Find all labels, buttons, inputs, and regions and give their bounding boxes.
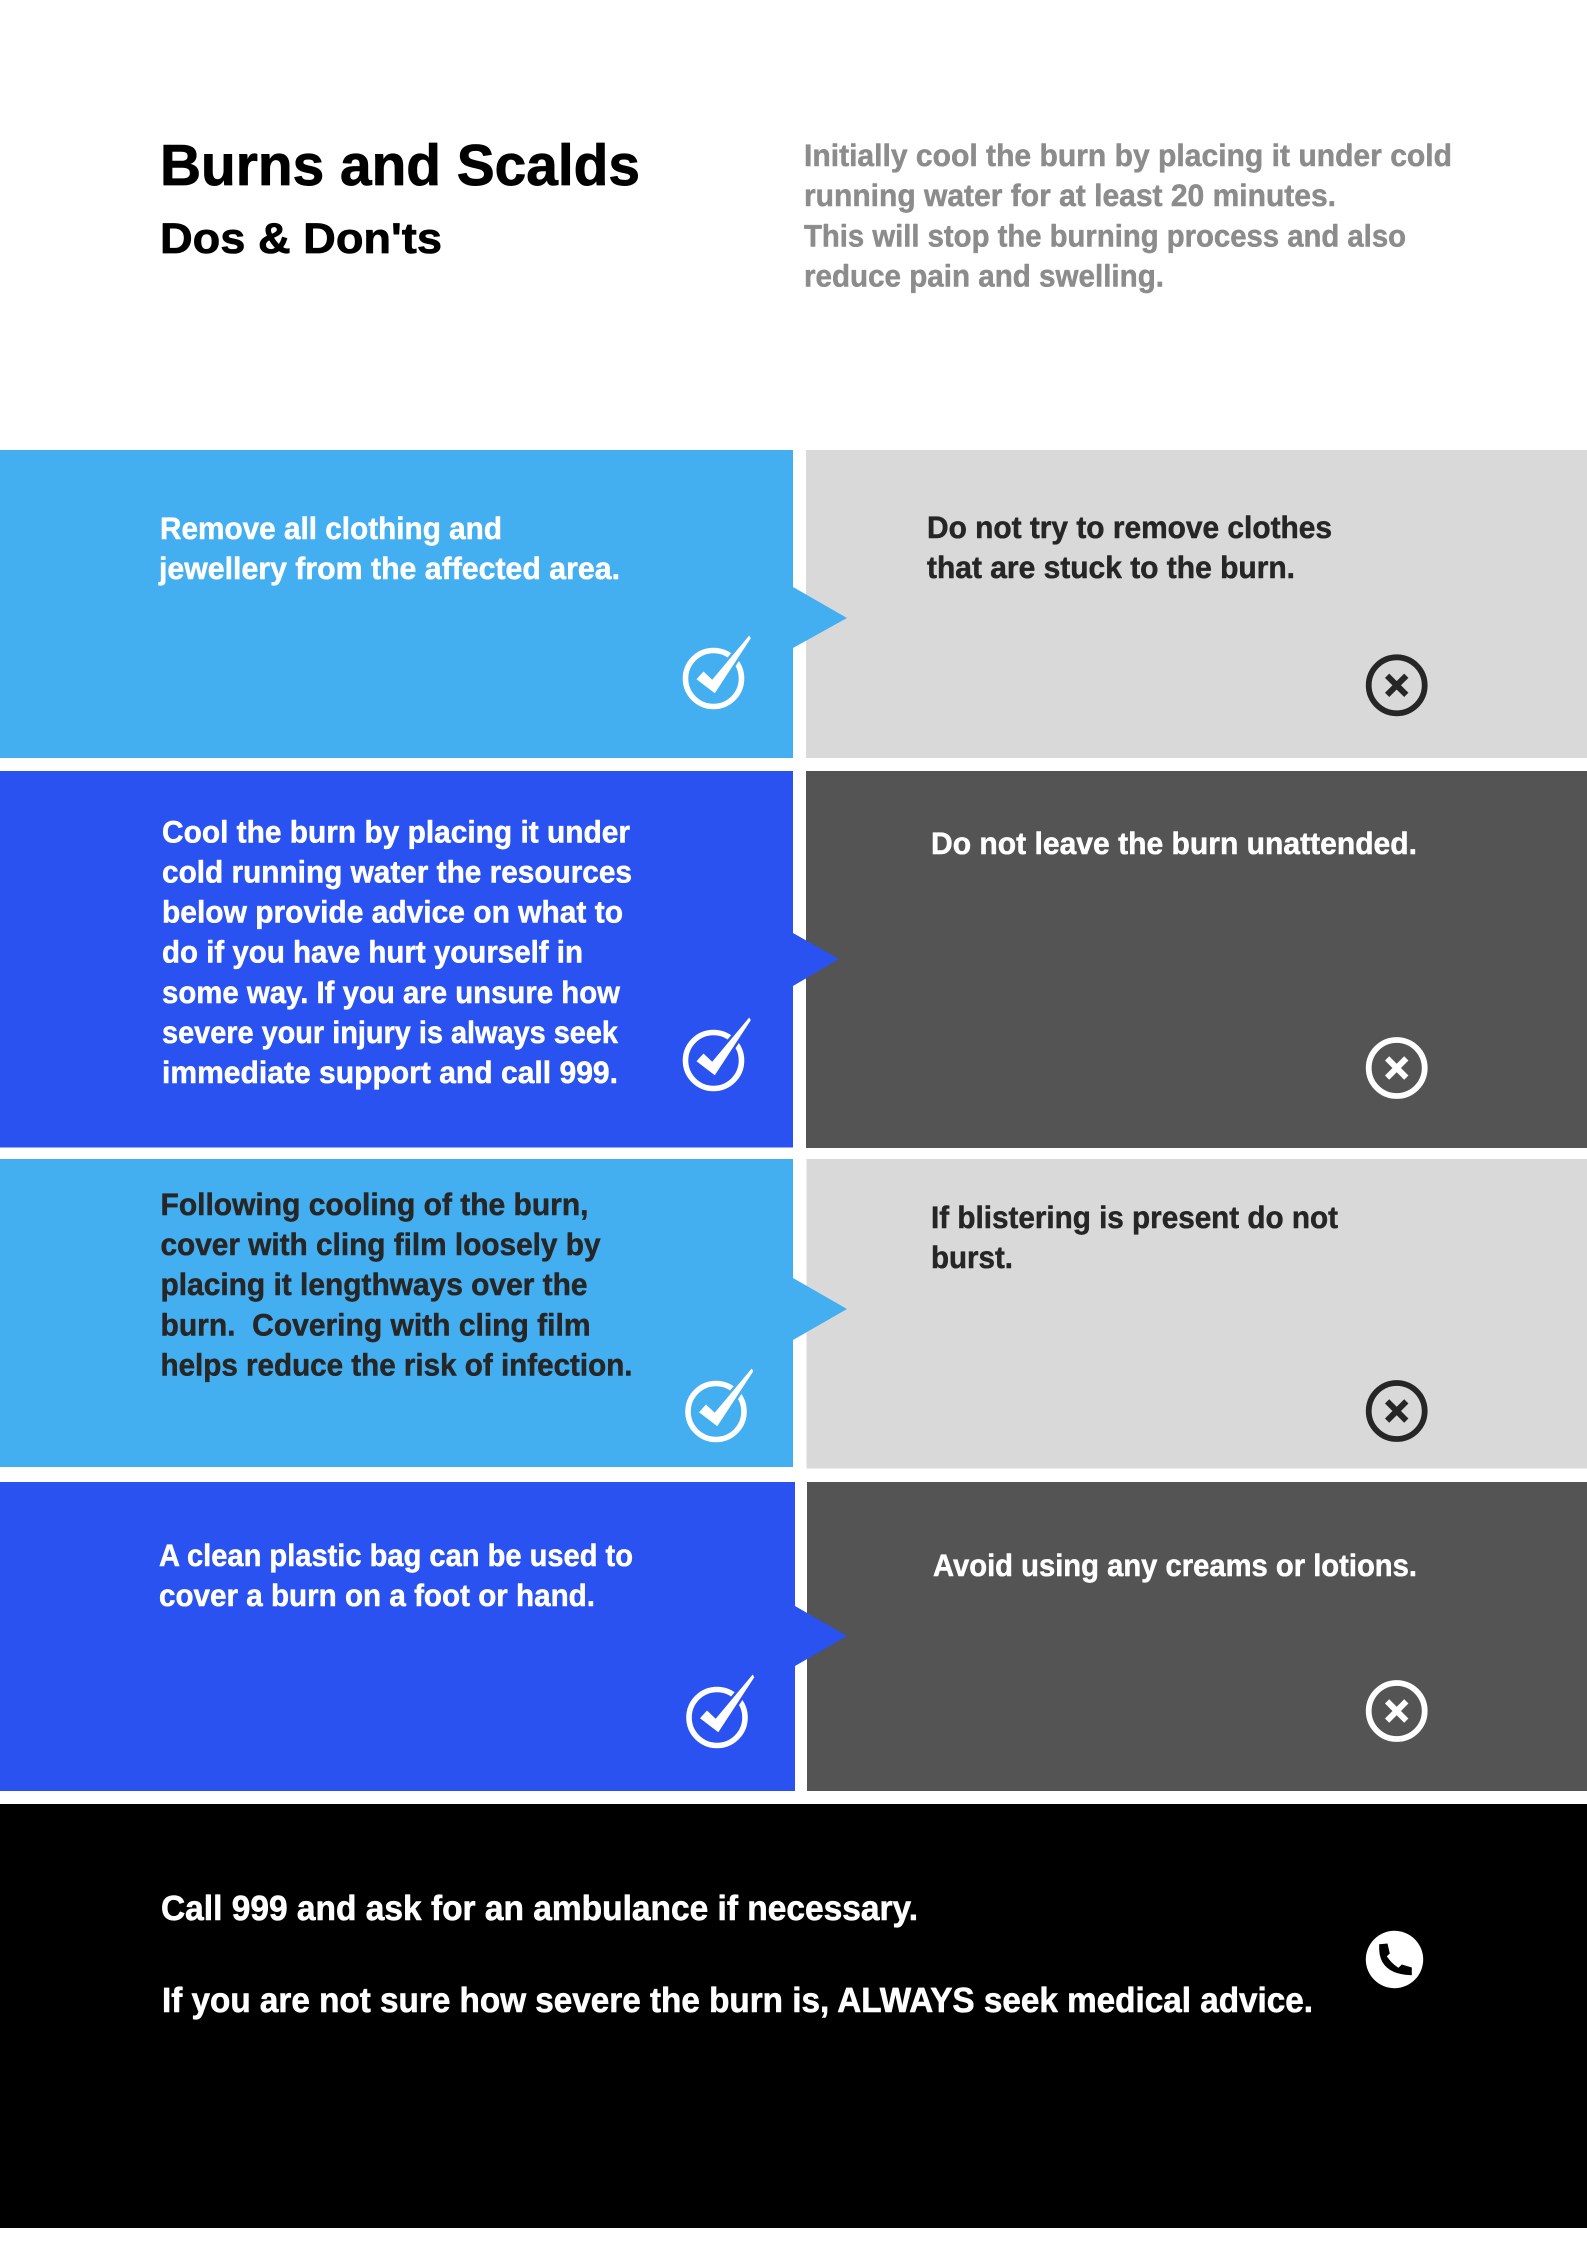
panel: don't 1 <box>806 450 1587 758</box>
panel: don't 3: If blistering is present do not <box>931 1200 1338 1235</box>
panel: do 2: some way. If you are unsure how <box>162 975 621 1010</box>
panel: emergency call: If you are not sure how severe the burn is, ALWAYS seek medical advice. <box>162 1981 1313 2020</box>
panel: do 2: do if you have hurt yourself in <box>162 935 583 970</box>
panel: do 4 <box>0 1482 847 1791</box>
panel: don't 4 <box>807 1482 1587 1791</box>
panel: do 3: Following cooling of the burn, <box>160 1187 588 1222</box>
title: Burns and Scalds <box>160 133 640 198</box>
icon: phone <box>1366 1931 1423 1988</box>
panel: do 4: cover a burn on a foot or hand. <box>159 1578 595 1613</box>
icon: cross 4 <box>1369 1683 1425 1739</box>
panel: do 3: cover with cling film loosely by <box>160 1227 601 1262</box>
panel: do 1: Remove all clothing and <box>160 511 502 546</box>
panel: emergency call <box>0 1804 1587 2228</box>
panel: don't 1: that are stuck to the burn. <box>927 550 1295 585</box>
row 3 <box>0 1159 1587 1468</box>
intro text: This will stop the burning process and also <box>804 218 1406 254</box>
panel: do 2: below provide advice on what to <box>162 895 623 930</box>
panel: do 3: helps reduce the risk of infection. <box>160 1348 632 1383</box>
panel: do 4: A clean plastic bag can be used to <box>159 1538 633 1573</box>
icon: check 3 <box>688 1368 753 1440</box>
icon: check 2 <box>686 1018 751 1088</box>
panel: emergency call: Call 999 and ask for an ambulance if necessary. <box>161 1889 918 1928</box>
panel: do 2: severe your injury is always seek <box>162 1015 619 1050</box>
panel: do 3: burn. Covering with cling film <box>160 1308 590 1343</box>
icon: check 4 <box>689 1674 754 1746</box>
panel: don't 1: Do not try to remove clothes <box>927 510 1332 545</box>
panel: do 3 <box>0 1159 847 1467</box>
panel: don't 3: burst. <box>931 1240 1013 1275</box>
icon: cross 2 <box>1369 1040 1425 1096</box>
panel: do 2: Cool the burn by placing it under <box>162 815 630 850</box>
icon: cross 1 <box>1369 657 1425 713</box>
row 2 <box>0 771 1587 1148</box>
panel: do 2: immediate support and call 999. <box>162 1055 618 1090</box>
panel: don't 3 <box>806 1159 1587 1468</box>
panel: do 1 <box>0 450 847 758</box>
header <box>160 133 1452 294</box>
intro text: reduce pain and swelling. <box>804 258 1164 294</box>
row 1 <box>0 450 1587 758</box>
panel: do 1: jewellery from the affected area. <box>158 551 620 586</box>
icon: check 1 <box>686 636 751 706</box>
panel: do 3: placing it lengthways over the <box>160 1267 588 1302</box>
intro text: Initially cool the burn by placing it under cold <box>804 138 1452 173</box>
intro text <box>804 138 1452 294</box>
panel: don't 2: Do not leave the burn unattended. <box>931 826 1417 861</box>
row 4 <box>0 1482 1587 1791</box>
icon: cross 3 <box>1369 1383 1425 1439</box>
intro text: running water for at least 20 minutes. <box>804 178 1336 213</box>
panel: do 2: cold running water the resources <box>162 855 632 890</box>
panel: do 2 <box>0 771 839 1148</box>
panel: don't 4: Avoid using any creams or lotions. <box>933 1548 1417 1583</box>
subtitle: Dos & Don'ts <box>160 215 442 263</box>
panel: don't 2 <box>806 771 1587 1148</box>
